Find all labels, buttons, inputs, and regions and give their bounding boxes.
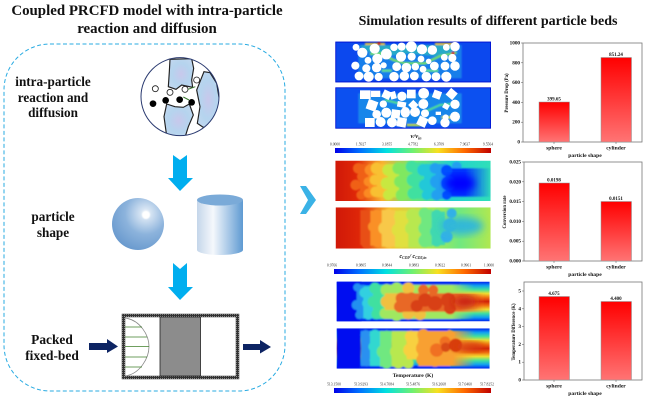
- chart: pressure drop: 399.65: [547, 98, 561, 102]
- colorbar: velocity: 4.7782: [408, 142, 418, 146]
- chart: temperature difference: 1: [518, 360, 521, 366]
- colorbar label: velocity: in: [418, 136, 422, 140]
- chart: pressure drop: 200: [512, 120, 520, 126]
- chart: pressure drop: 600: [512, 80, 520, 86]
- title: right: Simulation results of different particle beds: [359, 14, 618, 29]
- chart: conversion rate: 0.020: [509, 179, 521, 185]
- colorbar label: concentration ratio: c: [400, 254, 402, 260]
- colorbar: concentration: 0.9766: [327, 264, 337, 268]
- colorbar: concentration: 1.0000: [484, 264, 494, 268]
- chart: temperature difference: 2: [518, 342, 521, 348]
- chart: temperature difference: 4: [518, 306, 521, 312]
- chart: pressure drop: [505, 40, 642, 159]
- chart: conversion rate: 0.0151: [609, 197, 623, 202]
- bar: cylinder pressure drop: [601, 58, 632, 142]
- label: particle shape: particle: [31, 209, 75, 224]
- chart: conversion rate: 0.015: [509, 199, 521, 205]
- bar: sphere conversion: [539, 183, 570, 261]
- colorbar label: velocity: v/v: [411, 133, 418, 140]
- colorbar: velocity: 1.5927: [356, 142, 366, 146]
- icon: cylinder: [197, 194, 243, 255]
- colorbar: temperature: [327, 382, 494, 393]
- contour: sphere bed velocity: [335, 42, 491, 82]
- chart: conversion rate: 0.000: [509, 258, 521, 264]
- bar: sphere temperature difference: [539, 296, 570, 380]
- label: intra-particle reaction and diffusion: intra-particle: [15, 74, 91, 89]
- title: left: Coupled PRCFD model with intra-particle: [11, 3, 283, 19]
- contour: cylinder bed temperature: [337, 328, 490, 369]
- arrow: inlet: [89, 339, 118, 353]
- chart: conversion rate: 0.025: [509, 160, 521, 166]
- chart: temperature difference: particle shape: [568, 391, 602, 397]
- colorbar: concentration: 0.9805: [356, 264, 366, 268]
- bar: cylinder temperature difference: [601, 302, 632, 380]
- colorbar: concentration: 0.9922: [435, 264, 445, 268]
- label: particle shape: shape: [37, 225, 69, 240]
- colorbar: velocity: 6.3709: [434, 142, 444, 146]
- colorbar label: temperature: Temperature (K): [393, 372, 433, 379]
- icon: sphere: [112, 198, 164, 250]
- label: intra-particle reaction and diffusion: reaction and: [18, 90, 89, 105]
- label: packed fixed-bed: fixed-bed: [25, 348, 79, 363]
- chart: temperature difference: 3: [518, 324, 521, 330]
- panel: CO2 concentration contours: [327, 161, 494, 274]
- chart: conversion rate: sphere: [546, 264, 562, 270]
- colorbar: velocity: 7.9637: [460, 142, 470, 146]
- contour: sphere bed temperature: [337, 282, 490, 321]
- arrow: down to particle shape: [168, 155, 193, 191]
- arrow: down to packed bed: [168, 263, 193, 300]
- chart: pressure drop: 1000: [510, 40, 520, 46]
- label: intra-particle reaction and diffusion: diffusion: [28, 105, 79, 120]
- label: intra-particle reaction and diffusion: [15, 74, 91, 120]
- chart: pressure drop: cylinder: [606, 146, 626, 152]
- chart: pressure drop: Pressure Drop (Pa): [505, 73, 510, 113]
- contour: cylinder bed velocity: [335, 87, 491, 129]
- colorbar label: concentration ratio: CO2,in: [415, 256, 426, 260]
- chart: pressure drop: 0: [517, 140, 520, 146]
- colorbar: temperature: 515.4876: [406, 382, 420, 386]
- chart: temperature difference: Temperature Difference (K): [512, 303, 517, 361]
- chart: conversion rate: particle shape: [568, 272, 602, 278]
- chart: temperature difference: 4.400: [610, 297, 622, 302]
- panel: model workflow: [4, 44, 285, 391]
- label: packed fixed-bed: Packed: [31, 332, 73, 347]
- diagram: packed fixed bed: [122, 314, 239, 379]
- chart: temperature difference: 5: [518, 288, 521, 294]
- colorbar label: concentration ratio: / c: [408, 254, 416, 260]
- colorbar: temperature: 514.7084: [380, 382, 394, 386]
- chart: conversion rate: cylinder: [606, 264, 626, 270]
- label: particle shape: [31, 209, 75, 240]
- chart: conversion rate: Conversion rate: [503, 196, 508, 228]
- colorbar: temperature: 513.9293: [354, 382, 368, 386]
- chart: pressure drop: 400: [512, 100, 520, 106]
- colorbar: concentration: 0.9883: [409, 264, 419, 268]
- bar: cylinder conversion: [601, 202, 632, 261]
- chart: conversion rate: 0.005: [509, 239, 521, 245]
- colorbar: temperature: 517.8252: [480, 382, 494, 386]
- colorbar: concentration: [327, 264, 494, 274]
- chart: pressure drop: 851.24: [609, 53, 623, 58]
- panel: temperature contours: [327, 282, 494, 393]
- chart: pressure drop: 800: [512, 60, 520, 66]
- title: left: [11, 3, 283, 37]
- arrow: outlet: [243, 340, 271, 354]
- colorbar: concentration: 0.9844: [382, 264, 392, 268]
- bar: sphere pressure drop: [539, 102, 570, 142]
- chart: conversion rate: 0.0198: [547, 178, 561, 184]
- chart: pressure drop: particle shape: [568, 153, 602, 159]
- colorbar: velocity: [330, 142, 493, 153]
- contour: sphere bed concentration: [335, 161, 492, 201]
- colorbar: velocity: 9.5564: [483, 142, 493, 146]
- colorbar: temperature: 513.1500: [327, 382, 341, 386]
- chart: temperature difference: sphere: [546, 384, 562, 390]
- colorbar: temperature: 516.2668: [432, 382, 446, 386]
- colorbar: velocity: 0.0000: [330, 142, 340, 146]
- chart: conversion rate: [503, 160, 642, 278]
- chart: temperature difference: cylinder: [606, 384, 626, 390]
- colorbar: temperature: 517.0460: [458, 382, 472, 386]
- icon: porous particle with diffusion: [141, 58, 220, 137]
- contour: cylinder bed concentration: [336, 207, 491, 249]
- title: left: reaction and diffusion: [77, 21, 217, 37]
- colorbar label: concentration ratio: CO2: [402, 256, 409, 260]
- arrow: chevron between panels: [300, 186, 316, 214]
- colorbar: concentration: 0.9961: [461, 264, 471, 268]
- label: packed fixed-bed: [25, 332, 79, 363]
- chart: temperature difference: 0: [518, 378, 521, 384]
- chart: temperature difference: [512, 282, 642, 397]
- chart: temperature difference: 4.675: [548, 292, 560, 297]
- chart: pressure drop: sphere: [546, 146, 562, 152]
- colorbar: velocity: 3.1855: [382, 142, 392, 146]
- panel: velocity contours: [330, 42, 493, 153]
- chart: conversion rate: 0.010: [509, 219, 521, 225]
